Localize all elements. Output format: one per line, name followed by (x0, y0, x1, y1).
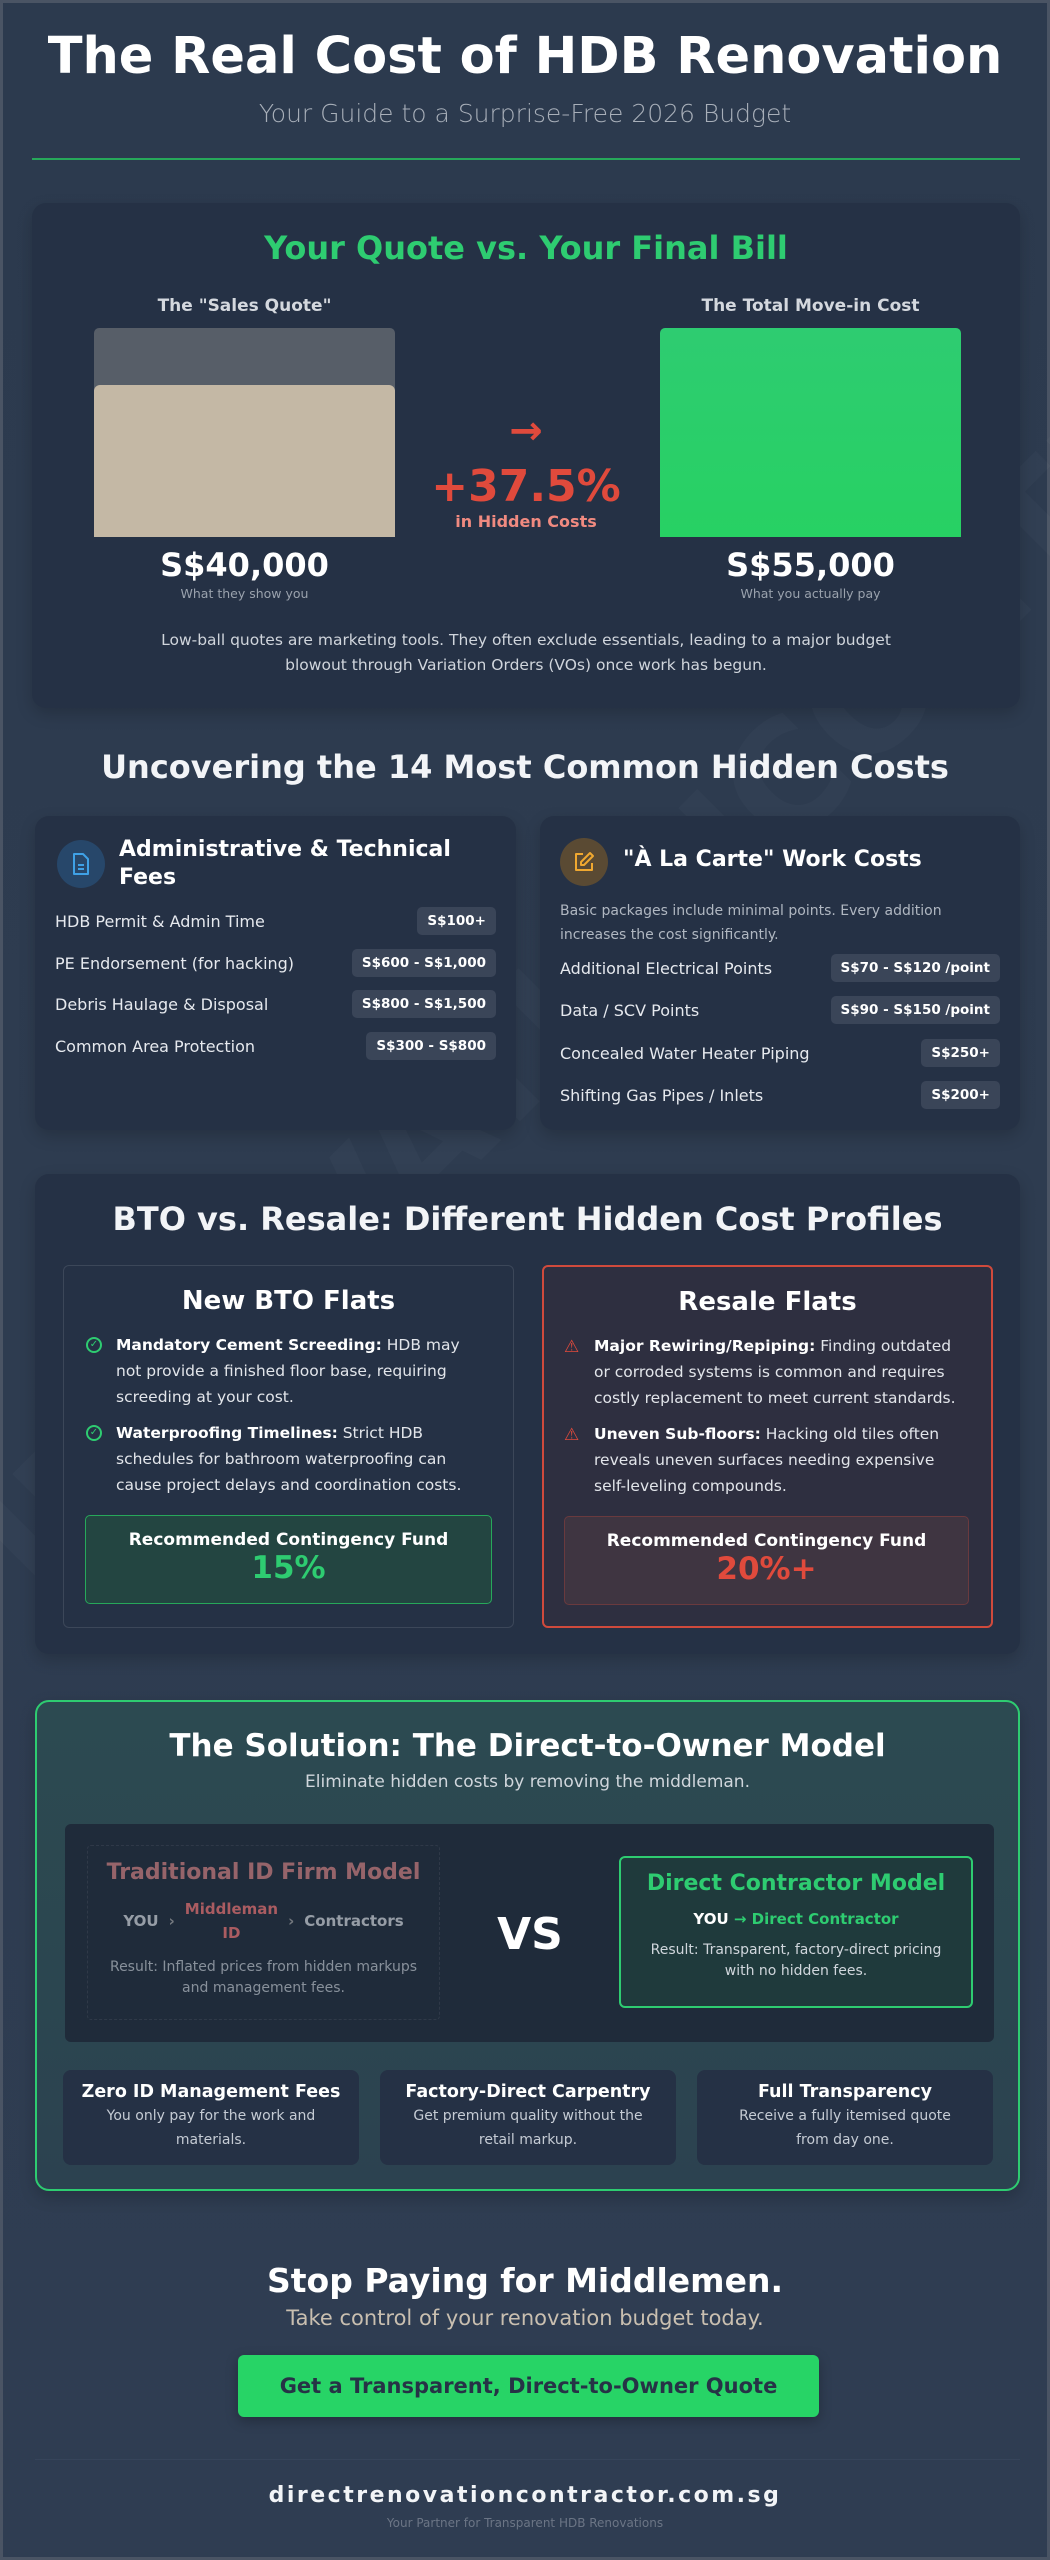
card: admin fees (35, 816, 516, 1130)
direct model: with no hidden fees. (725, 1963, 867, 1979)
traditional model: and management fees. (182, 1980, 345, 1996)
rows: Shifting Gas Pipes / Inlets (560, 1086, 763, 1104)
feature: transparency: Receive a fully itemised quote from day one. (739, 2108, 951, 2148)
panel: quote vs bill (32, 203, 1020, 708)
value: 55000: S$55,000 (726, 546, 895, 584)
CTA subheading: Take control of your renovation budget today. (286, 2306, 764, 2330)
rows (55, 907, 496, 1060)
rows: S$250+ (931, 1045, 990, 1061)
rows: S$90 - S$150 /point (841, 1002, 990, 1018)
panel: solution (35, 1700, 1020, 2191)
contingency fund: 15%: 15% (251, 1550, 326, 1586)
value: 40000 (160, 546, 329, 601)
item 2: ✓ (90, 1427, 98, 1438)
VS: VS (497, 1909, 563, 1960)
traditional model: Contractors (304, 1912, 404, 1930)
feature: carpentry: Factory-Direct Carpentry (405, 2082, 651, 2102)
item 1: Major Rewiring/Repiping: Finding outdated or corroded systems is common and requires costly replacement to meet current standards. (594, 1337, 956, 1407)
rows: S$70 - S$120 /point (841, 960, 990, 976)
rows: S$200+ (931, 1087, 990, 1103)
label: move-in cost: The Total Move-in Cost (701, 296, 920, 316)
value: 40000: S$40,000 (160, 546, 329, 584)
feature: carpentry: Get premium quality without the retail markup. (413, 2108, 643, 2148)
value: 40000: What they show you (181, 586, 308, 601)
contingency fund: 20%: 20%+ (716, 1551, 817, 1587)
traditional model: Middleman (185, 1900, 278, 1918)
item 1: ⚠ (564, 1337, 579, 1357)
traditional model: Result: Inflated prices from hidden markups (110, 1959, 417, 1975)
rows: PE Endorsement (for hacking) (55, 954, 294, 972)
panel: BTO vs resale (35, 1174, 1020, 1654)
feature: zero fees: You only pay for the work and materials. (107, 2108, 315, 2148)
card title: Administrative & Technical Fees (119, 837, 451, 890)
card title: "À La Carte" Work Costs (623, 847, 922, 872)
item 1: ✓ (90, 1339, 98, 1350)
rows: Additional Electrical Points (560, 958, 772, 978)
traditional model: › (288, 1912, 294, 1930)
subheading: New BTO Flats (182, 1286, 395, 1316)
label: sales quote: The "Sales Quote" (158, 296, 331, 316)
feature: zero fees: Zero ID Management Fees (82, 2082, 340, 2102)
subheading: Resale Flats (678, 1287, 857, 1317)
feature: transparency (697, 2070, 993, 2165)
arrow: → (509, 408, 543, 454)
rows: S$800 - S$1,500 (362, 996, 486, 1012)
direct model (619, 1856, 973, 2008)
traditional model: › (169, 1912, 175, 1930)
footer domain: directrenovationcontractor.com.sg (269, 2483, 781, 2508)
bar: sales quote (94, 328, 395, 537)
item 2: ⚠ (564, 1425, 579, 1445)
section heading: hidden costs: Uncovering the 14 Most Common Hidden Costs (101, 748, 949, 786)
traditional model: YOU (123, 1912, 159, 1930)
footer tagline: Your Partner for Transparent HDB Renovations (387, 2516, 663, 2530)
rows: S$600 - S$1,000 (362, 955, 486, 971)
rows: S$100+ (427, 913, 486, 929)
rows: Data / SCV Points (560, 1000, 699, 1020)
contingency fund: 20% (564, 1516, 969, 1605)
explanation text: Low-ball quotes are marketing tools. They often exclude essentials, leading to a major budget blowout through Variation Orders (VOs) once work has begun. (161, 631, 891, 674)
subpanel: BTO (63, 1265, 514, 1628)
icon: edit (560, 838, 608, 886)
item 2: Waterproofing Timelines: Strict HDB schedules for bathroom waterproofing can cause project delays and coordination costs. (116, 1424, 461, 1494)
feature: transparency: Full Transparency (758, 2082, 932, 2102)
comparison box (65, 1824, 994, 2042)
icon: document (57, 840, 105, 888)
traditional model (87, 1845, 440, 2020)
heading: BTO vs. Resale: Different Hidden Cost Profiles (112, 1200, 942, 1238)
contingency fund: 15% (85, 1515, 492, 1604)
heading: The Solution: The Direct-to-Owner Model (169, 1728, 886, 1764)
title: The Real Cost of HDB Renovation (48, 27, 1002, 86)
direct model: Direct Contractor Model (647, 1871, 945, 1896)
rows: Common Area Protection (55, 1036, 255, 1056)
direct model: YOU → Direct Contractor (693, 1910, 899, 1928)
item 1: Mandatory Cement Screeding: HDB may not provide a finished floor base, requiring screeding at your cost. (116, 1336, 460, 1406)
value: 55000: What you actually pay (740, 586, 881, 601)
CTA heading: Stop Paying for Middlemen. (267, 2261, 783, 2300)
subpanel: resale (542, 1265, 993, 1628)
value: 55000 (726, 546, 895, 601)
traditional model: ID (222, 1924, 240, 1942)
hidden cost stat: +37.5% (431, 461, 621, 512)
feature: carpentry (380, 2070, 676, 2165)
heading: Your Quote vs. Your Final Bill (264, 229, 788, 267)
CTA button (238, 2355, 819, 2417)
rows: S$300 - S$800 (376, 1038, 486, 1054)
rows: Concealed Water Heater Piping (560, 1044, 810, 1062)
contingency fund: 15%: Recommended Contingency Fund (129, 1530, 448, 1550)
item 2: Uneven Sub-floors: Hacking old tiles often reveals uneven surfaces needing expensive self-leveling compounds. (594, 1425, 939, 1495)
contingency fund: 20%: Recommended Contingency Fund (607, 1531, 926, 1551)
card: a la carte (540, 816, 1020, 1130)
CTA button: Get a Transparent, Direct-to-Owner Quote (280, 2374, 777, 2398)
bar: total (660, 328, 961, 537)
rows: HDB Permit & Admin Time (55, 912, 265, 930)
hidden cost stat: in Hidden Costs (455, 512, 597, 531)
traditional model: Traditional ID Firm Model (107, 1860, 420, 1885)
description: Basic packages include minimal points. Every addition increases the cost significantly. (560, 903, 942, 943)
feature: zero fees (63, 2070, 359, 2165)
direct model: Result: Transparent, factory-direct pricing (651, 1942, 941, 1958)
rows (560, 954, 1000, 1109)
subheading: Eliminate hidden costs by removing the middleman. (305, 1772, 750, 1792)
rows: Debris Haulage & Disposal (55, 994, 268, 1014)
subtitle: Your Guide to a Surprise-Free 2026 Budget (259, 99, 791, 128)
